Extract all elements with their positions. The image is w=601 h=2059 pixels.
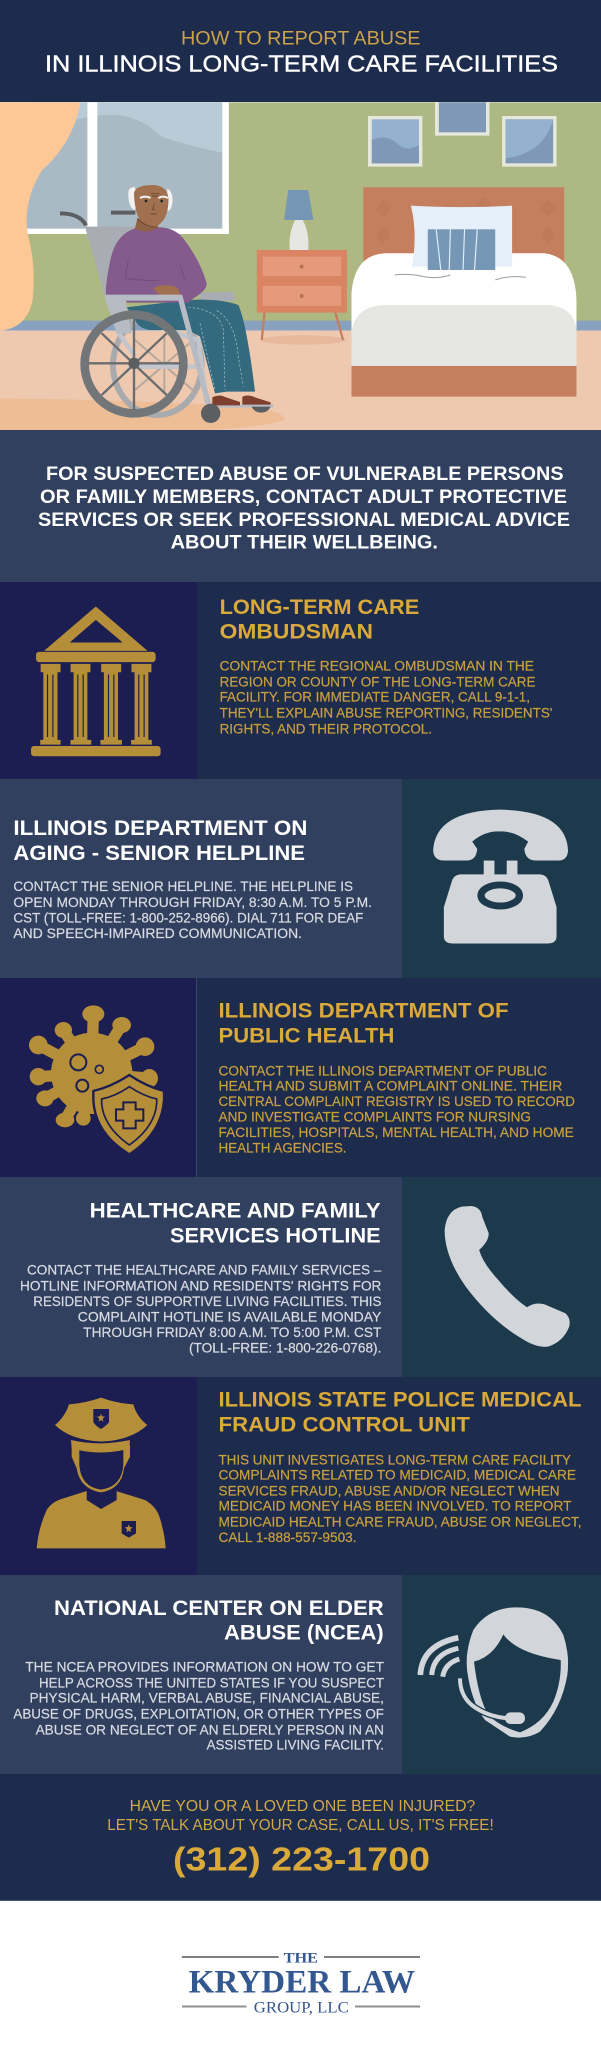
- heading: ILLINOIS STATE POLICE MEDICAL: [218, 1389, 582, 1412]
- body text: REGION OR COUNTY OF THE LONG-TERM CARE: [220, 674, 536, 689]
- lamp: [284, 190, 314, 250]
- intro panel: ABOUT THEIR WELLBEING.: [171, 533, 438, 554]
- body text: THIS UNIT INVESTIGATES LONG-TERM CARE FACILITY: [218, 1452, 571, 1467]
- intro panel: FOR SUSPECTED ABUSE OF VULNERABLE PERSONS: [46, 464, 564, 485]
- heading: [90, 1200, 381, 1248]
- body text: THE NCEA PROVIDES INFORMATION ON HOW TO GET: [25, 1659, 384, 1674]
- body text: [218, 1063, 575, 1156]
- body text: HEALTH AGENCIES.: [218, 1141, 346, 1156]
- title line one: HOW TO REPORT ABUSE: [181, 28, 420, 50]
- body text: THEY'LL EXPLAIN ABUSE REPORTING, RESIDENTS': [220, 706, 552, 721]
- logo: the kryder law group: [182, 1951, 420, 2016]
- body text: FACILITY. FOR IMMEDIATE DANGER, CALL 9-1-1,: [220, 690, 530, 705]
- intro panel: [0, 430, 601, 582]
- body text: ABUSE OR NEGLECT OF AN ELDERLY PERSON IN AN: [36, 1722, 384, 1737]
- heading: [218, 1000, 509, 1048]
- nightstand: [257, 250, 347, 345]
- wall pictures: [368, 102, 557, 167]
- body text: RESIDENTS OF SUPPORTIVE LIVING FACILITIES. THIS: [33, 1294, 381, 1309]
- logo: the kryder law group: THE: [284, 1951, 318, 1967]
- call to action text: HAVE YOU OR A LOVED ONE BEEN INJURED?: [130, 1798, 476, 1815]
- heading: OMBUDSMAN: [220, 620, 373, 644]
- icon: rotary telephone: [433, 810, 568, 943]
- illustration: elderly man in wheelchair in a care facility room: [0, 102, 601, 430]
- body text: PHYSICAL HARM, VERBAL ABUSE, FINANCIAL ABUSE,: [30, 1690, 384, 1705]
- body text: MEDICAID HEALTH CARE FRAUD, ABUSE OR NEGLECT,: [218, 1514, 582, 1529]
- body text: [20, 1262, 382, 1355]
- panel: healthcare and family services hotline: [0, 1177, 601, 1377]
- body text: [13, 1659, 384, 1752]
- logo: the kryder law group: GROUP, LLC: [254, 1999, 349, 2016]
- panel: long-term care ombudsman: [0, 582, 601, 779]
- body text: HOTLINE INFORMATION AND RESIDENTS' RIGHTS FOR: [20, 1278, 382, 1293]
- body text: AND INVESTIGATE COMPLAINTS FOR NURSING: [218, 1109, 531, 1124]
- body text: FACILITIES, HOSPITALS, MENTAL HEALTH, AND HOME: [218, 1125, 574, 1140]
- heading: [220, 596, 419, 644]
- icon: call-centre agent with headset: [420, 1607, 568, 1738]
- heading: [54, 1597, 384, 1645]
- panel: illinois state police medical fraud control unit: [0, 1377, 601, 1575]
- header banner: [0, 0, 601, 102]
- icon: courthouse: [31, 606, 161, 756]
- body text: AND SPEECH-IMPAIRED COMMUNICATION.: [13, 926, 302, 941]
- body text: [220, 658, 552, 736]
- body text: CONTACT THE HEALTHCARE AND FAMILY SERVICES –: [27, 1262, 382, 1277]
- panel: illinois department of public health: [0, 978, 601, 1177]
- heading: [13, 817, 307, 865]
- call to action banner: [0, 1774, 601, 1901]
- body text: OPEN MONDAY THROUGH FRIDAY, 8:30 A.M. TO 5 P.M.: [13, 895, 372, 910]
- body text: [218, 1452, 582, 1545]
- logo: the kryder law group: KRYDER LAW: [189, 1964, 415, 2000]
- heading: [218, 1389, 582, 1437]
- body text: MEDICAID MONEY HAS BEEN INVOLVED. TO REPORT: [218, 1498, 572, 1513]
- body text: RIGHTS, AND THEIR PROTOCOL.: [220, 721, 432, 736]
- heading: NATIONAL CENTER ON ELDER: [54, 1597, 384, 1620]
- phone number: (312) 223-1700: [173, 1841, 430, 1878]
- body text: (TOLL-FREE: 1-800-226-0768).: [189, 1340, 381, 1355]
- heading: PUBLIC HEALTH: [218, 1025, 394, 1048]
- body text: [13, 879, 372, 941]
- heading: SERVICES HOTLINE: [170, 1225, 381, 1248]
- window: [27, 102, 229, 234]
- body text: CONTACT THE ILLINOIS DEPARTMENT OF PUBLIC: [218, 1063, 547, 1078]
- icon: police officer: [37, 1398, 166, 1548]
- heading: ABUSE (NCEA): [224, 1622, 384, 1645]
- call to action text: LET'S TALK ABOUT YOUR CASE, CALL US, IT'S FREE!: [107, 1817, 494, 1834]
- intro panel: SERVICES OR SEEK PROFESSIONAL MEDICAL ADVICE: [38, 510, 570, 531]
- body text: HEALTH AND SUBMIT A COMPLAINT ONLINE. THEIR: [218, 1078, 562, 1093]
- body text: CALL 1-888-557-9503.: [218, 1530, 356, 1545]
- call to action text: [107, 1798, 494, 1834]
- body text: SERVICES FRAUD, ABUSE AND/OR NEGLECT WHEN: [218, 1483, 560, 1498]
- icon: virus with shield: [29, 1005, 164, 1154]
- heading: ILLINOIS DEPARTMENT ON: [13, 817, 307, 840]
- heading: AGING - SENIOR HELPLINE: [13, 842, 305, 865]
- man in wheelchair: [0, 185, 284, 430]
- title line two: IN ILLINOIS LONG-TERM CARE FACILITIES: [45, 51, 558, 77]
- body text: CONTACT THE REGIONAL OMBUDSMAN IN THE: [220, 658, 534, 674]
- intro panel: OR FAMILY MEMBERS, CONTACT ADULT PROTECTIVE: [40, 487, 567, 508]
- heading: FRAUD CONTROL UNIT: [218, 1414, 470, 1437]
- heading: ILLINOIS DEPARTMENT OF: [218, 1000, 509, 1023]
- body text: COMPLAINTS RELATED TO MEDICAID, MEDICAL CARE: [218, 1468, 576, 1483]
- curtain: [0, 102, 80, 331]
- body text: CST (TOLL-FREE: 1-800-252-8966). DIAL 711 FOR DEAF: [13, 910, 363, 925]
- body text: THROUGH FRIDAY 8:00 A.M. TO 5:00 P.M. CST: [83, 1325, 381, 1340]
- body text: CENTRAL COMPLAINT REGISTRY IS USED TO RECORD: [218, 1094, 575, 1109]
- body text: ASSISTED LIVING FACILITY.: [207, 1737, 384, 1752]
- panel: illinois department on aging senior helpline: [0, 779, 601, 978]
- heading: HEALTHCARE AND FAMILY: [90, 1200, 381, 1223]
- body text: ABUSE OF DRUGS, EXPLOITATION, OR OTHER TYPES OF: [13, 1706, 384, 1721]
- body text: HELP ACROSS THE UNITED STATES IF YOU SUSPECT: [39, 1675, 384, 1690]
- icon: telephone handset: [445, 1206, 570, 1347]
- body text: CONTACT THE SENIOR HELPLINE. THE HELPLINE IS: [13, 879, 353, 894]
- bed: [351, 187, 576, 397]
- body text: COMPLAINT HOTLINE IS AVAILABLE MONDAY: [78, 1309, 381, 1324]
- panel: national center on elder abuse: [0, 1575, 601, 1774]
- heading: LONG-TERM CARE: [220, 596, 419, 619]
